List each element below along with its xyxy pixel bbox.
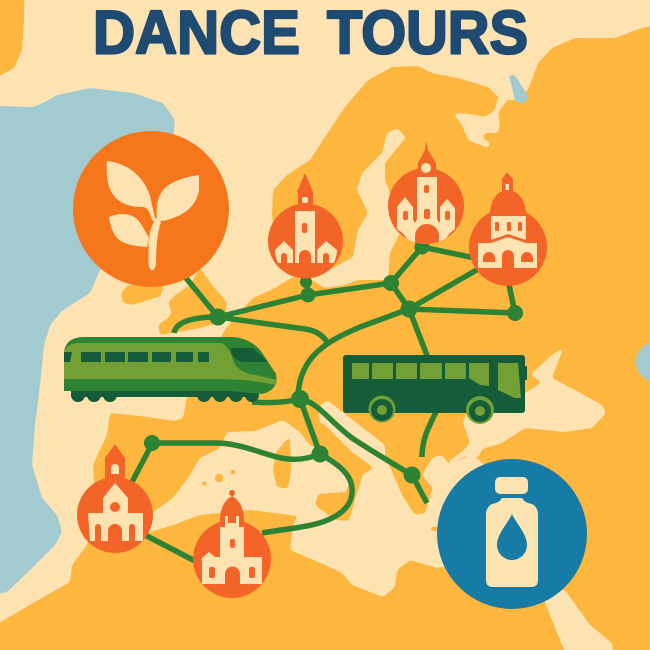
- land: ireland: [121, 285, 164, 305]
- title: TOURS: [327, 0, 528, 66]
- plant leaves and stem: [107, 161, 199, 270]
- icon: church south-centre: [193, 490, 271, 598]
- icon: town north-centre: [388, 141, 464, 245]
- sea: red sea: [540, 590, 616, 650]
- bus mirror: [520, 366, 527, 380]
- bus body: [343, 355, 525, 413]
- bus wheels: [368, 396, 494, 424]
- train windows: [64, 348, 268, 362]
- route network: [132, 240, 523, 561]
- sea: mediterranean, adriatic and aegean: [125, 400, 490, 597]
- train light stripe: [64, 343, 277, 385]
- sea: atlantic: [0, 88, 175, 600]
- islands: [202, 470, 439, 531]
- land: top-left corner: [0, 0, 25, 76]
- icon: town north-west: [268, 173, 343, 278]
- land: italy: [305, 416, 374, 521]
- icon: church south-west: [77, 444, 153, 553]
- icon: train: [64, 337, 277, 402]
- sea: baltic inlet: [453, 95, 520, 148]
- icon: water bottle circle: [437, 459, 587, 609]
- icon: town north-east: [469, 172, 547, 286]
- water drop: [497, 514, 527, 560]
- inland sea on right edge: [636, 342, 650, 382]
- land: britain: [158, 268, 227, 335]
- route stops: [144, 240, 523, 484]
- lake: [509, 75, 527, 103]
- bottle: [486, 477, 538, 587]
- sea: black sea: [448, 347, 606, 466]
- icon: plant circle: [73, 131, 229, 287]
- train wheels: [71, 388, 259, 402]
- title: DANCE: [93, 0, 300, 66]
- icon: bus: [343, 355, 527, 424]
- land: corsica: [273, 436, 291, 489]
- train body: [64, 337, 276, 394]
- bus windows: [352, 363, 521, 398]
